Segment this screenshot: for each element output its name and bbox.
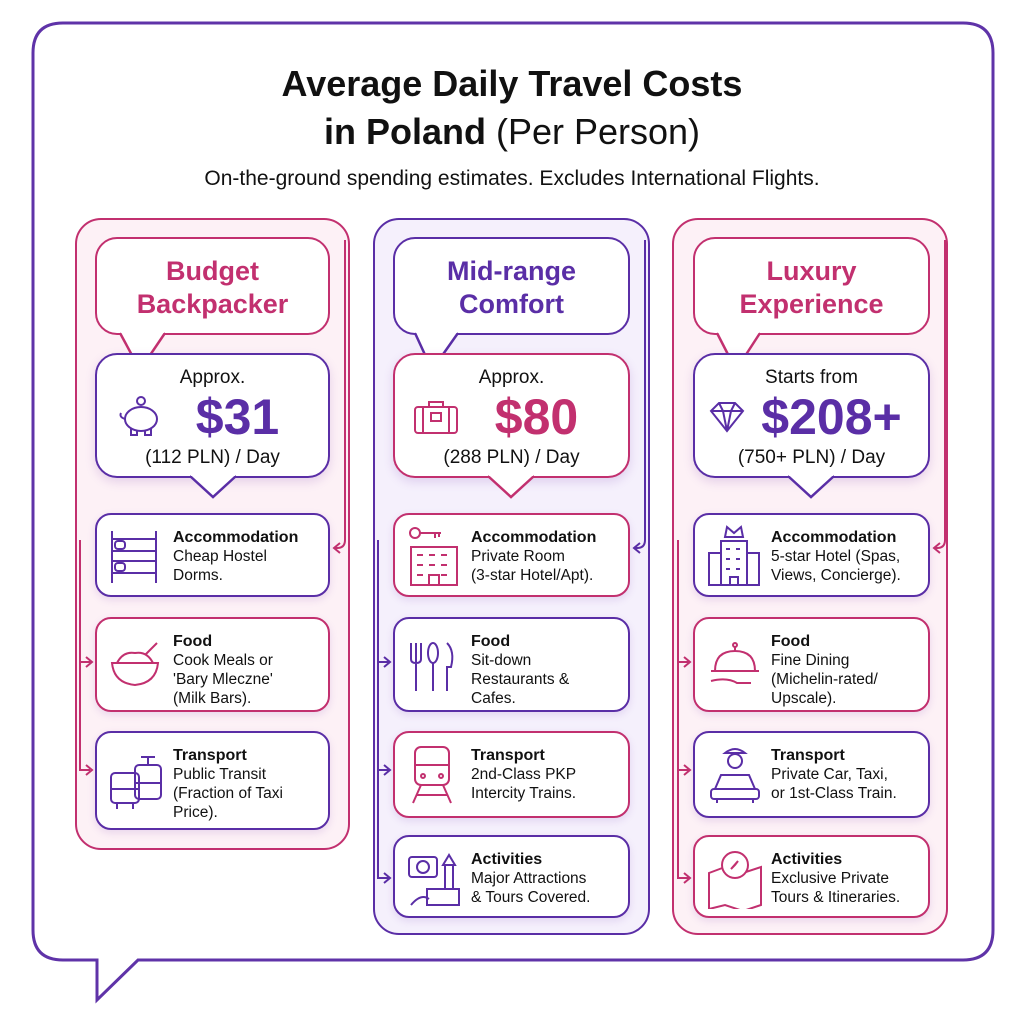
icon: piggy bank	[120, 396, 158, 436]
icon: suitcase	[414, 401, 458, 434]
price box: mid-range: $80	[495, 389, 578, 445]
price box: budget: $31	[196, 389, 279, 445]
panel: budget column	[75, 218, 350, 850]
price box: luxury: $208+	[761, 389, 902, 445]
item: mid accommodation	[393, 513, 630, 597]
price box: luxury	[693, 353, 930, 478]
item: luxury accommodation	[693, 513, 930, 597]
header: Mid-range Comfort: Mid-range	[447, 256, 576, 286]
item: mid food: Sit-down	[471, 652, 531, 669]
item: mid activities: Major Attractions	[471, 870, 586, 887]
price box: mid-range: (288 PLN) / Day	[443, 447, 580, 468]
header: Luxury Experience	[693, 237, 930, 335]
icon: 5-star hotel	[708, 525, 760, 586]
item: budget transport	[95, 731, 330, 830]
item: luxury food: (Michelin-rated/	[771, 671, 878, 688]
item: luxury food: Fine Dining	[771, 652, 849, 669]
icon: map and compass	[708, 851, 762, 909]
item: luxury food: Food	[771, 633, 810, 650]
icon: cutlery	[410, 642, 454, 691]
item: mid transport: Transport	[471, 747, 545, 764]
item: luxury activities: Tours & Itineraries.	[771, 889, 900, 906]
price box: mid-range	[393, 353, 630, 478]
price box: luxury: Starts from	[765, 367, 858, 388]
header: Luxury Experience: Experience	[739, 289, 884, 319]
price box: budget: (112 PLN) / Day	[145, 447, 280, 468]
header: Mid-range Comfort	[393, 237, 630, 335]
header: Luxury Experience: Luxury	[766, 256, 857, 286]
item: budget food: (Milk Bars).	[173, 690, 251, 707]
icon: key and hotel	[409, 527, 458, 586]
item: mid transport: 2nd-Class PKP	[471, 766, 576, 783]
title: in Poland (Per Person)	[324, 111, 700, 152]
item: luxury transport: Transport	[771, 747, 845, 764]
item: budget food: Cook Meals or	[173, 652, 273, 669]
header: Budget Backpacker: Budget	[166, 256, 259, 286]
item: luxury transport: or 1st-Class Train.	[771, 785, 897, 802]
price box: budget	[95, 353, 330, 478]
item: budget food	[95, 617, 330, 712]
icon: diamond	[710, 402, 744, 432]
item: budget accommodation: Accommodation	[173, 529, 298, 546]
item: mid activities: Activities	[471, 851, 542, 868]
title: Average Daily Travel Costs	[282, 63, 742, 104]
item: budget transport: Public Transit	[173, 766, 266, 783]
item: mid food: Food	[471, 633, 510, 650]
item: luxury activities: Activities	[771, 851, 842, 868]
item: luxury transport	[693, 731, 930, 818]
icon: chauffeur car	[710, 748, 760, 803]
item: mid food	[393, 617, 630, 712]
item: budget transport: Price).	[173, 804, 218, 821]
item: mid activities: & Tours Covered.	[471, 889, 590, 906]
price box: luxury: (750+ PLN) / Day	[738, 447, 885, 468]
item: luxury accommodation: Accommodation	[771, 529, 896, 546]
item: budget transport: (Fraction of Taxi	[173, 785, 283, 802]
item: mid food: Cafes.	[471, 690, 516, 707]
header: Budget Backpacker: Backpacker	[137, 289, 288, 319]
icon: bus and tram	[110, 756, 162, 809]
price box: budget: Approx.	[180, 367, 245, 388]
icon: train	[412, 746, 452, 804]
item: budget transport: Transport	[173, 747, 247, 764]
item: mid food: Restaurants &	[471, 671, 569, 688]
item: mid transport	[393, 731, 630, 818]
panel: luxury column	[672, 218, 948, 935]
panel: mid-range column	[373, 218, 650, 935]
price box: mid-range: Approx.	[479, 367, 544, 388]
item: mid activities	[393, 835, 630, 918]
item: mid transport: Intercity Trains.	[471, 785, 576, 802]
item: mid accommodation: (3-star Hotel/Apt).	[471, 567, 593, 584]
subtitle: On-the-ground spending estimates. Excludes International Flights.	[204, 167, 820, 190]
item: luxury accommodation: Views, Concierge).	[771, 567, 901, 584]
header: Budget Backpacker	[95, 237, 330, 335]
item: mid accommodation: Private Room	[471, 548, 565, 565]
item: luxury activities	[693, 835, 930, 918]
item: luxury activities: Exclusive Private	[771, 870, 889, 887]
icon: rice bowl	[110, 642, 160, 686]
header: Mid-range Comfort: Comfort	[459, 289, 564, 319]
icon: camera and castle	[408, 853, 460, 906]
item: budget food: Food	[173, 633, 212, 650]
item: luxury accommodation: 5-star Hotel (Spas,	[771, 548, 900, 565]
item: luxury food	[693, 617, 930, 712]
item: budget accommodation	[95, 513, 330, 597]
icon: bunk bed	[111, 531, 157, 583]
item: budget accommodation: Cheap Hostel	[173, 548, 267, 565]
item: budget accommodation: Dorms.	[173, 567, 223, 584]
item: luxury food: Upscale).	[771, 690, 836, 707]
item: luxury transport: Private Car, Taxi,	[771, 766, 888, 783]
title	[282, 63, 742, 152]
item: mid accommodation: Accommodation	[471, 529, 596, 546]
item: budget food: 'Bary Mleczne'	[173, 671, 273, 688]
icon: cloche	[710, 642, 759, 684]
